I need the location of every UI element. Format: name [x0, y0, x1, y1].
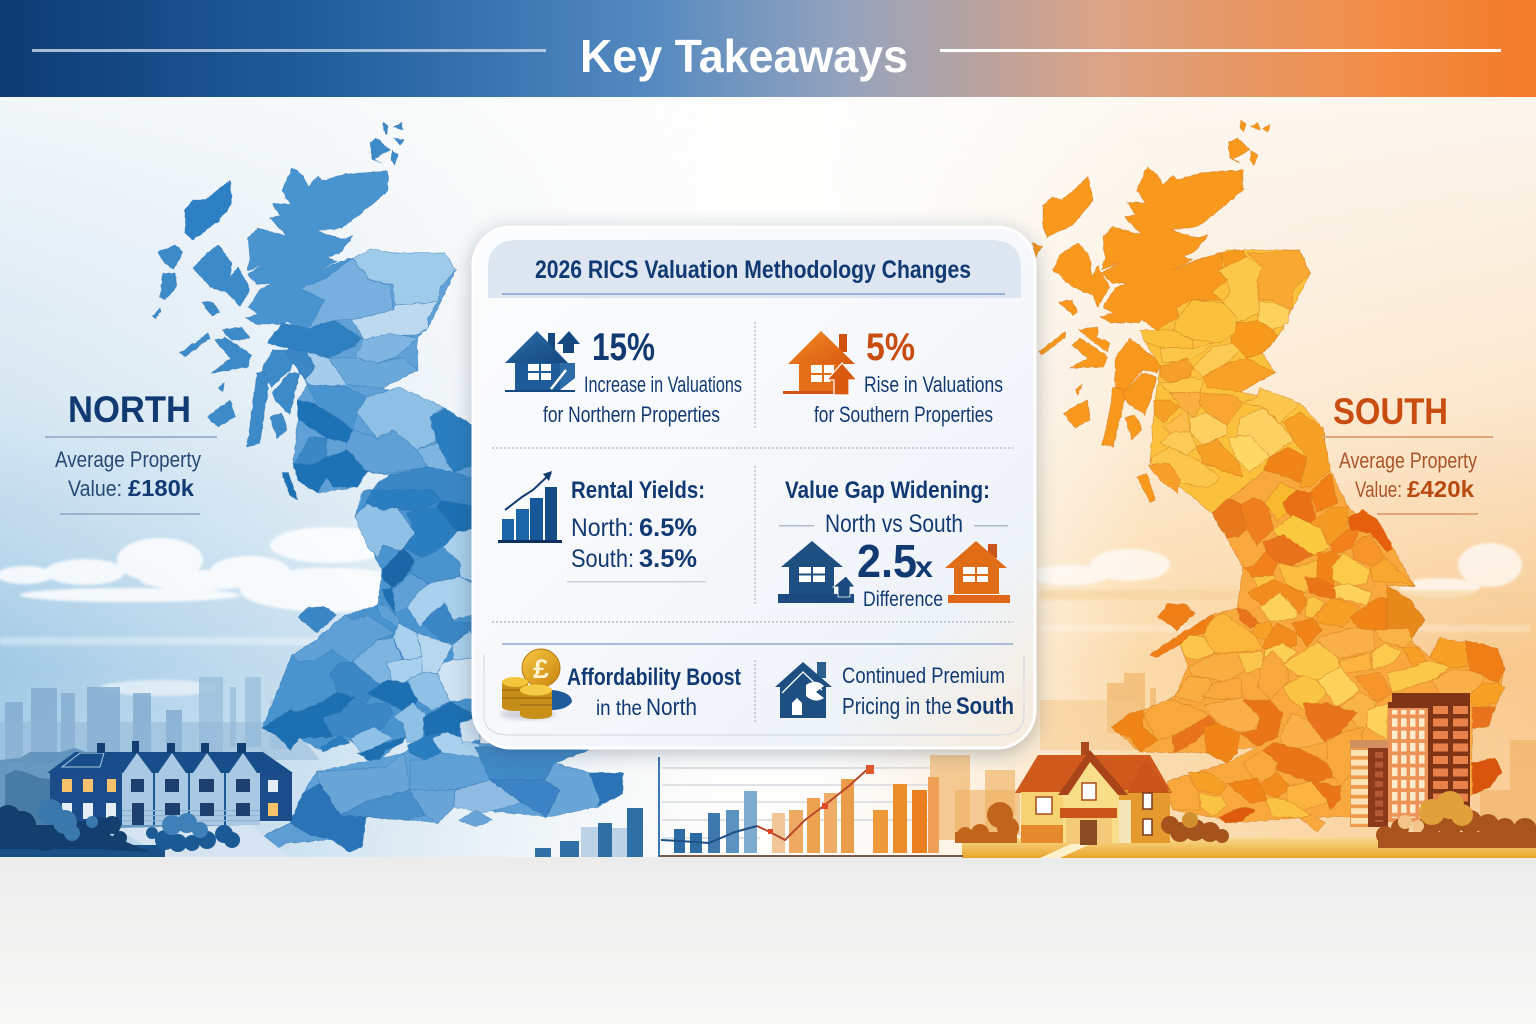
stat: 15% north [505, 326, 742, 427]
stat: affordability: Affordability Boost [567, 664, 741, 691]
stat: value gap [778, 477, 1010, 611]
south label [1322, 391, 1493, 515]
Scotland regions [245, 168, 480, 510]
icon: pound coins: £ [533, 654, 549, 684]
icon: orange house [945, 541, 1010, 603]
icon: blue house with arrow [505, 331, 580, 392]
skyline: north [0, 677, 320, 830]
stat: 5% south: for Southern Properties [814, 402, 993, 427]
north label: £180k [128, 475, 194, 501]
stat: rental yields: 3.5% [639, 545, 697, 573]
stat: value gap: Difference [863, 588, 943, 611]
stat: 5% south [783, 326, 1003, 427]
stat: rental yields: South: [571, 545, 634, 573]
Scottish islands [152, 122, 404, 500]
north label: NORTH [68, 389, 191, 430]
stat: premium: Continued Premium [842, 663, 1005, 688]
stat: affordability: North [646, 694, 697, 721]
stat: value gap: 2.5 [857, 535, 917, 587]
stat: rental yields: Rental Yields: [571, 477, 705, 504]
map: north UK in blue [152, 122, 623, 853]
stat: affordability [500, 649, 741, 721]
mainland base [1112, 250, 1505, 822]
ground: south [658, 838, 1536, 858]
bar chart: centre [658, 757, 939, 857]
Scottish islands [1032, 120, 1270, 502]
stat: rental yields: North: [571, 514, 634, 542]
stat: premium [775, 662, 1014, 720]
stat: rental yields [498, 471, 706, 582]
south label: SOUTH [1333, 391, 1448, 432]
stat: 5% south: 5% [866, 326, 915, 369]
clouds: south [1030, 543, 1530, 632]
north label: Average Property [55, 447, 201, 472]
south label: £420k [1407, 476, 1474, 502]
stat: 15% north: 15% [592, 326, 655, 369]
skyline: south [930, 673, 1536, 840]
stat: rental yields: 6.5% [639, 514, 697, 542]
icon: premium house [775, 662, 832, 718]
stat: value gap: North vs South [825, 510, 963, 538]
house: south [1015, 742, 1172, 845]
stat: premium: Pricing in the [842, 693, 952, 719]
England and Wales regions [244, 490, 623, 853]
Scotland regions [1100, 167, 1330, 493]
mainland base [244, 258, 623, 853]
stat: 5% south: Rise in Valuations [864, 372, 1003, 397]
card header [488, 240, 1021, 298]
header banner [0, 0, 1536, 97]
towers: south [1350, 693, 1470, 827]
title: Key Takeaways [580, 30, 908, 82]
stat: affordability: in the [596, 697, 642, 720]
England and Wales regions [1112, 473, 1505, 832]
north label: Value: [68, 476, 122, 501]
card: methodology changes [473, 227, 1035, 748]
stat: value gap: x [915, 551, 933, 584]
icon: pound coins [500, 649, 572, 720]
stat: 15% north: Increase in Valuations [584, 372, 742, 397]
south label: Average Property [1339, 448, 1477, 473]
bushes: south [955, 791, 1536, 848]
card dividers [492, 322, 1013, 722]
clouds: north [0, 527, 420, 696]
card header: 2026 RICS Valuation Methodology Changes [535, 256, 971, 284]
small bar chart: north [535, 808, 643, 857]
page background [0, 97, 1536, 857]
stat: value gap: Value Gap Widening: [785, 477, 990, 504]
south label: Value: [1355, 477, 1402, 502]
terraced houses [47, 741, 293, 825]
stat: premium: South [956, 693, 1014, 720]
icon: orange house with arrow [783, 331, 857, 395]
icon: rising bar chart [498, 471, 562, 543]
ground: north path [115, 825, 290, 857]
north label [45, 389, 217, 515]
stat: 15% north: for Northern Properties [543, 402, 720, 427]
map: south UK in orange [1032, 120, 1505, 832]
bushes: north foreground [0, 799, 240, 857]
icon: navy house [778, 541, 855, 603]
